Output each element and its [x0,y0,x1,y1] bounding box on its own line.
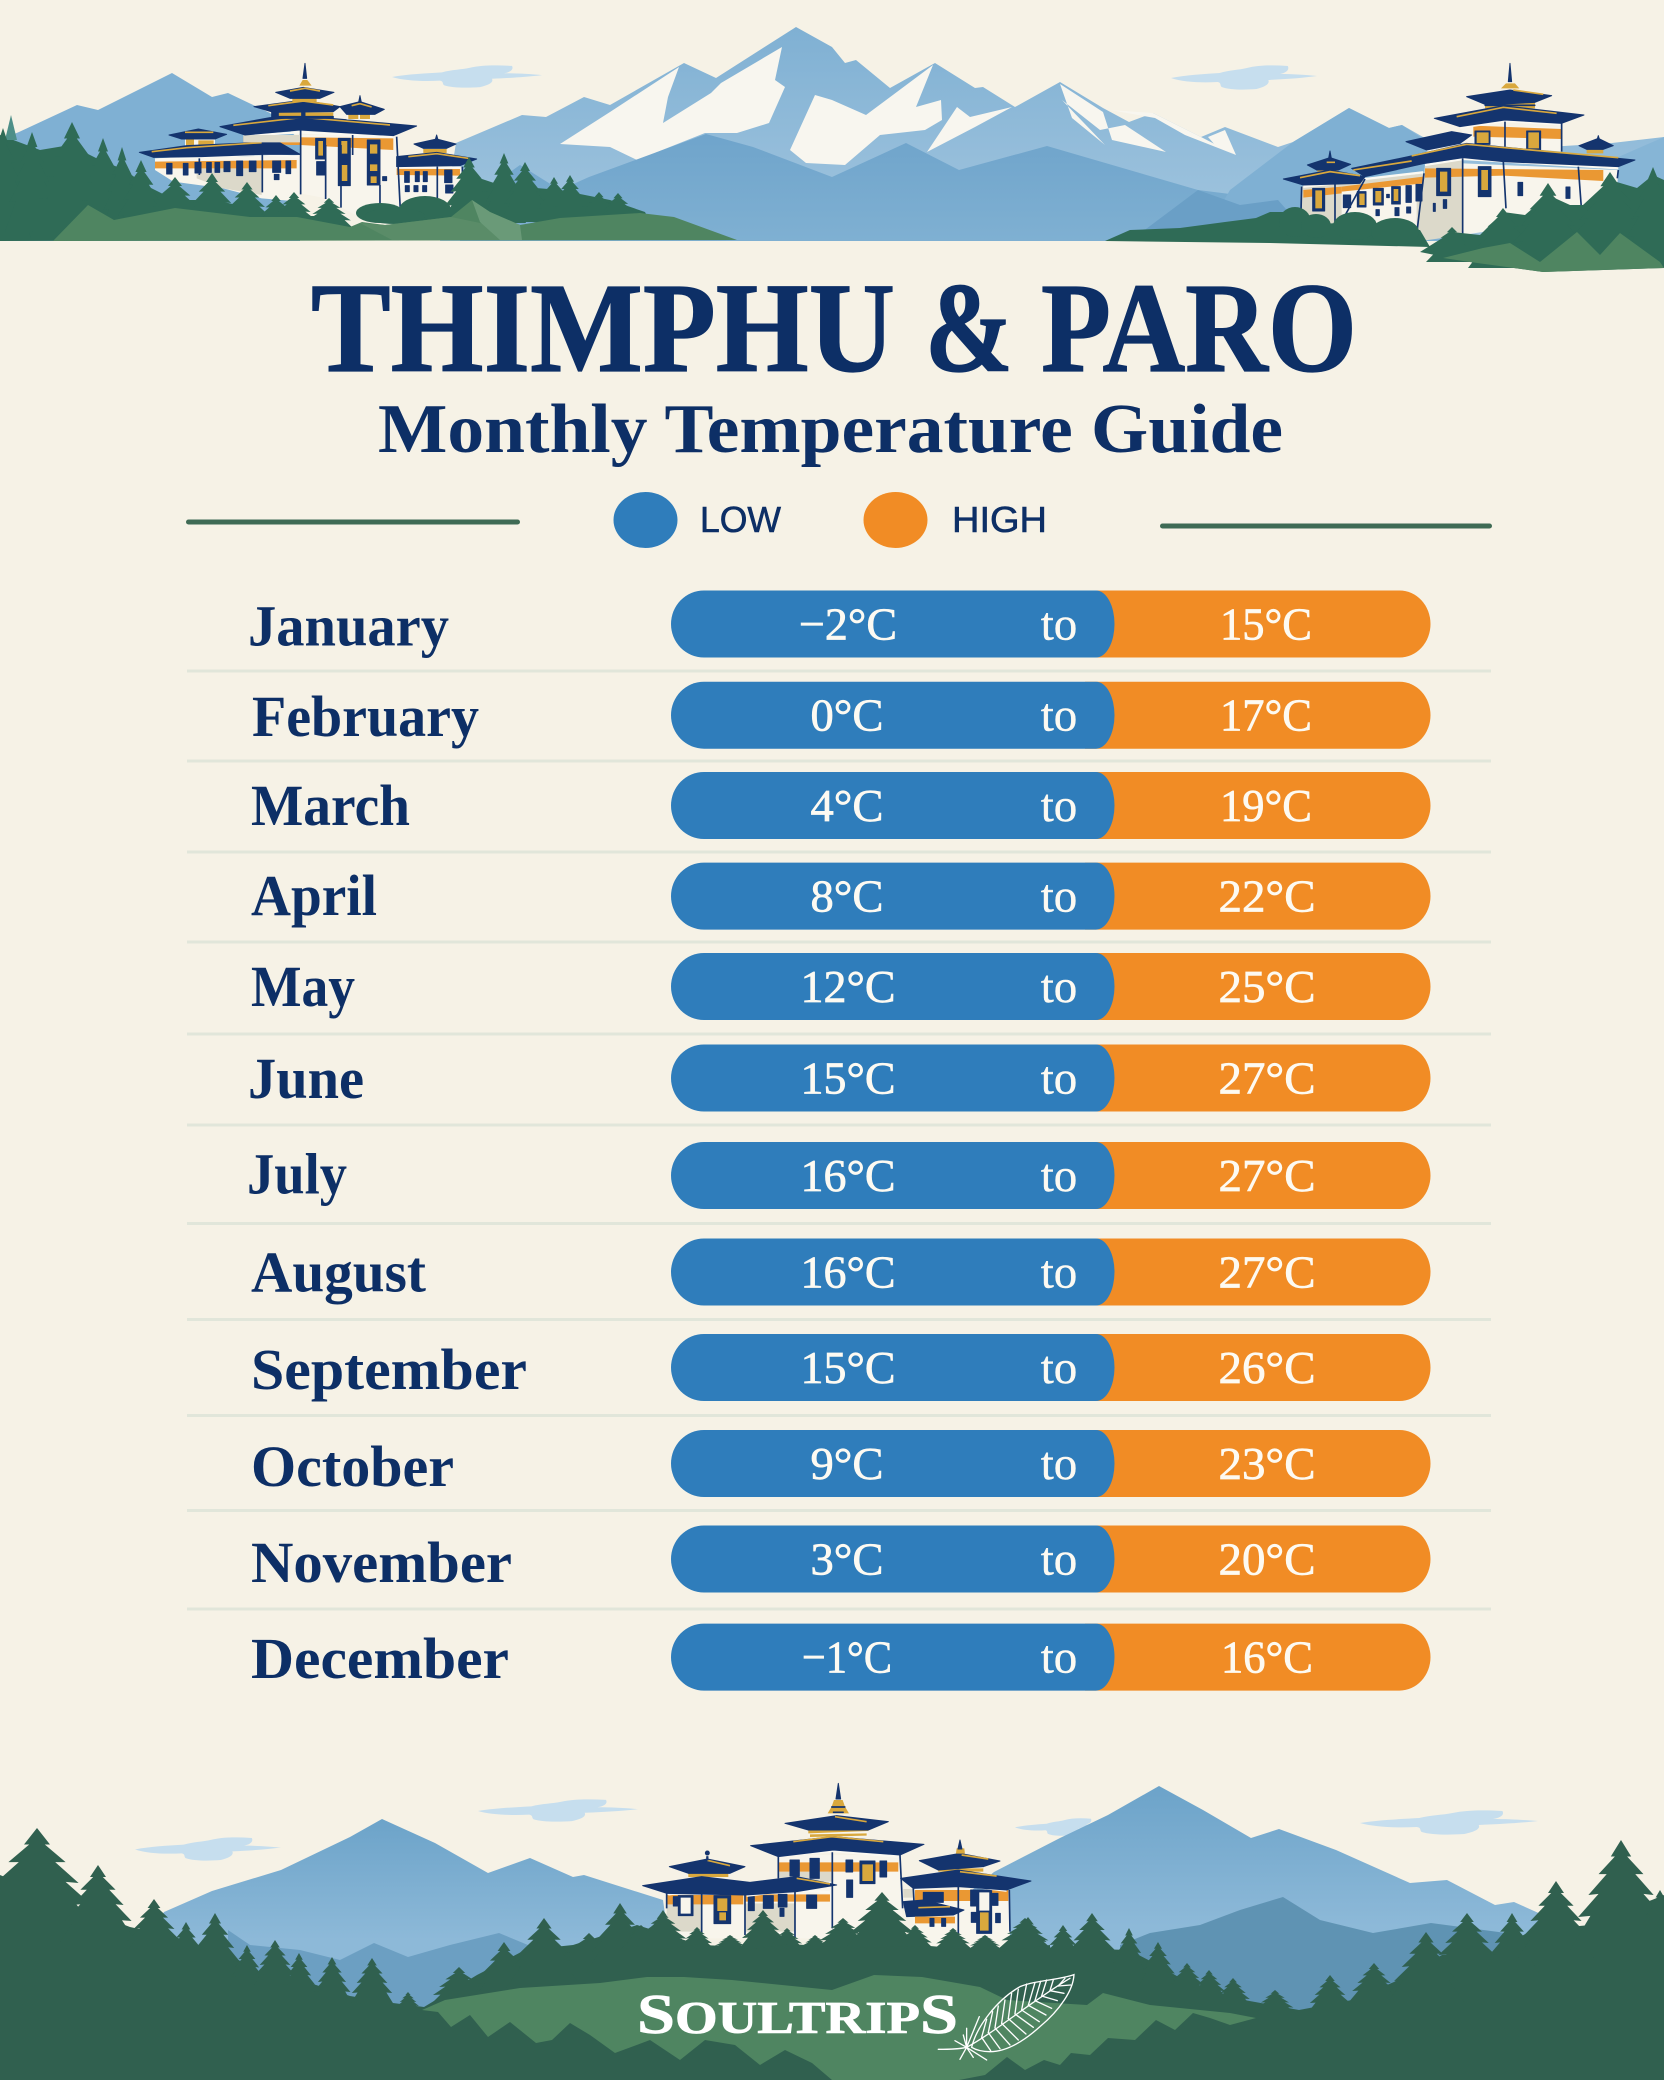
row: June [248,1044,1430,1112]
month: August: August [251,1240,427,1304]
lighter hill [360,217,522,240]
row: February [252,682,1430,749]
range pill: May: to [1041,961,1077,1013]
range pill: April: 22°C [1218,871,1316,922]
range pill: September: 26°C [1218,1342,1316,1393]
left divider [186,520,520,524]
legend label: low: LOW [700,499,781,540]
footer forest [0,1828,1664,2080]
light green clearing [422,1975,1256,2080]
month: January: January [248,594,449,658]
right footer mountain [960,1786,1580,2020]
row: September [251,1334,1430,1402]
range pill: October [671,1430,1430,1497]
range pill: April [671,863,1430,930]
month: December: December [251,1626,509,1691]
range pill: October: to [1041,1438,1077,1490]
subtitle: Monthly Temperature Guide [378,391,1283,468]
range pill: January: −2°C [799,598,897,650]
row: November [251,1526,1430,1595]
month: November: November [251,1530,512,1595]
row: January [248,590,1430,658]
icon: feather [938,1975,1074,2060]
range pill: January: 15°C [1220,598,1312,650]
range pill: December: 16°C [1221,1632,1313,1683]
range pill: November [671,1526,1430,1592]
main title [311,257,1357,399]
left footer mountain [130,1819,680,2020]
left forest [0,115,650,241]
month: July: July [247,1142,347,1206]
range pill: August: 27°C [1218,1246,1316,1298]
range pill: May [671,953,1430,1020]
row: December [251,1624,1430,1691]
legend label: high: HIGH [952,499,1047,540]
cloud: footer centre left [478,1799,638,1822]
cloud: top right [1171,65,1317,90]
brand wordmark: SOULTRIP S [637,1984,958,2046]
range pill: February [671,682,1430,749]
cloud: footer left [135,1837,281,1861]
range pill: May: 12°C [800,961,896,1012]
legend swatch: high [864,492,928,548]
range pill: December: −1°C [802,1632,892,1683]
footer foreground trees [620,1892,1053,2000]
left forest and hills in header [0,115,737,241]
month: October: October [251,1434,454,1499]
range pill: February: to [1041,690,1077,742]
cloud: footer centre right [1015,1818,1110,1836]
cloud: top left [392,65,542,88]
range pill: August [671,1238,1430,1306]
range pill: October: 23°C [1218,1438,1316,1489]
range pill: October: 9°C [810,1438,884,1489]
month: March: March [251,773,410,838]
legend swatch: low [614,492,678,548]
footer illustration: mountains and forest [0,1786,1664,2080]
cloud: footer right [1360,1810,1538,1835]
range pill: March: 4°C [810,780,884,831]
header illustration: mountains [0,27,1664,241]
range pill: July: to [1041,1150,1077,1202]
month: June: June [248,1046,364,1111]
month: May: May [251,954,355,1019]
left footer shadow ridge [228,1930,540,2020]
range pill: November: to [1041,1534,1077,1586]
range pill: November: 20°C [1218,1534,1316,1584]
row: October [251,1430,1430,1499]
range pill: January: to [1041,598,1077,650]
lower right ridge [1130,190,1300,241]
range pill: August: 16°C [800,1246,896,1298]
left dzong in header [139,63,477,221]
snow caps [560,47,1236,165]
right divider [1160,524,1492,528]
range pill: June: 27°C [1218,1052,1316,1104]
range pill: December: to [1041,1632,1077,1684]
range pill: February: 0°C [810,690,884,741]
month: April: April [251,863,377,928]
light green foreground, header right [1443,232,1664,272]
range pill: April: to [1041,871,1077,923]
range pill: February: 17°C [1220,690,1312,741]
range pill: September: 15°C [800,1342,896,1393]
range pill: March [671,772,1430,839]
range pill: April: 8°C [810,871,884,922]
range pill: December [671,1624,1430,1691]
footer dzong [643,1783,1031,1950]
range pill: July: 16°C [800,1150,896,1201]
range pill: August: to [1041,1246,1077,1298]
right footer shadow ridge [1120,1897,1560,2030]
month: February: February [252,684,479,749]
main title: & [925,257,1013,399]
main title: PARO [1041,257,1357,399]
month: September: September [251,1337,527,1402]
row: August [251,1238,1430,1306]
range pill: June: 15°C [800,1052,896,1104]
range pill: November: 3°C [810,1534,884,1584]
right distant peak [1200,108,1450,241]
right forest in header [1105,167,1664,272]
range pill: September [671,1334,1430,1401]
range pill: June: to [1041,1052,1077,1104]
range pill: July: 27°C [1218,1150,1316,1201]
range pill: May: 25°C [1218,961,1316,1012]
lighter hill right [472,200,522,240]
range pill: March: 19°C [1220,780,1312,831]
range pill: June [671,1044,1430,1112]
right dzong in header [1283,63,1635,242]
legend [614,492,1047,548]
row: April [251,863,1430,930]
row: March [251,772,1430,839]
range pill: January [671,590,1430,658]
range pill: July [671,1142,1430,1209]
central snow range [440,27,1664,241]
row: May [251,953,1430,1020]
front blue ridges [456,134,1300,241]
range pill: March: to [1041,780,1077,832]
row: July [247,1142,1430,1209]
range pill: September: to [1041,1342,1077,1394]
panel: monthly temperature table [187,590,1491,1691]
left blue mountain [0,73,300,241]
green ground base [53,200,737,241]
main title: THIMPHU [311,257,895,399]
